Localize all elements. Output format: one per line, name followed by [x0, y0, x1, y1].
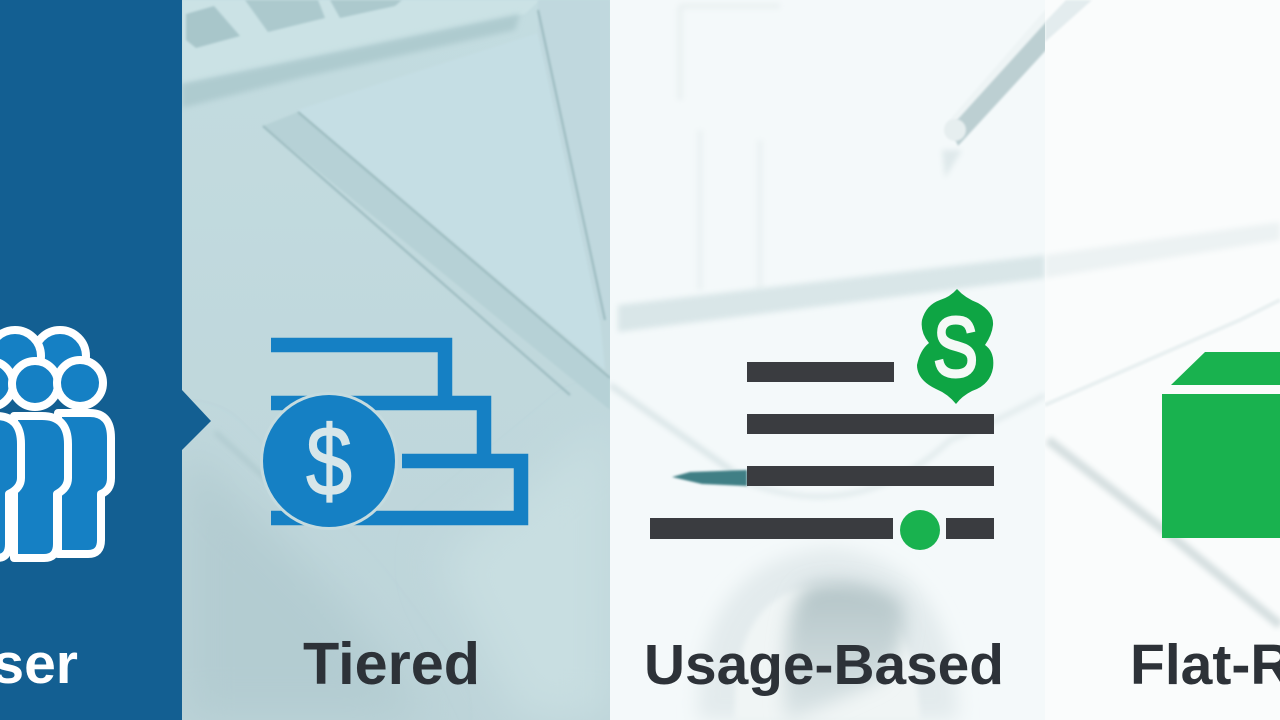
decorative smear: [672, 470, 747, 486]
icon: tiered steps with dollar coin: [260, 345, 521, 530]
icon: usage bars with dollar badge: S: [933, 301, 978, 395]
label: Usage-Based: Usage-Based: [644, 633, 1004, 697]
background photo: notebook, pen and mug: [610, 21, 1045, 720]
background photo: calculator and paper: [182, 0, 610, 720]
panel: per-user: [0, 0, 182, 720]
icon: usage bars with dollar badge: [650, 289, 994, 550]
panel: flat-rate: [1045, 0, 1280, 720]
icon: group of people: [0, 330, 111, 558]
icon: tiered steps with dollar coin: $: [306, 406, 352, 517]
arrow: per-user to tiered: [182, 390, 211, 450]
background photo: pen end and table edges: [1045, 0, 1280, 625]
icon: flat-rate box: [1162, 352, 1280, 538]
label: Tiered: Tiered: [303, 631, 480, 697]
panel: tiered: [182, 0, 610, 720]
panel: usage-based: [610, 6, 1045, 720]
